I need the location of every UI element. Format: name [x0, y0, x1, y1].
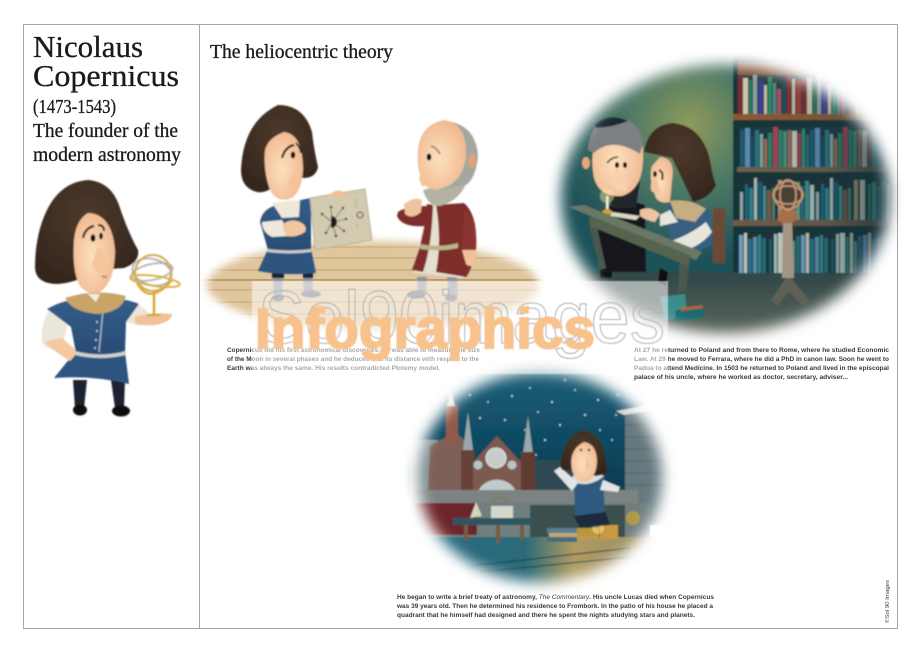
bookshelves	[732, 62, 890, 274]
eyes and brows	[91, 234, 95, 242]
watermark	[252, 276, 668, 374]
sloped desk	[569, 205, 702, 292]
stacked books	[660, 294, 704, 322]
hair	[241, 105, 318, 192]
watermark outline text: Sol90images	[258, 276, 665, 359]
legs and shoes	[73, 380, 125, 408]
chair	[713, 208, 725, 263]
book stacks and glowing chest	[547, 511, 640, 542]
open book with diagram	[310, 189, 372, 250]
copyright note: ©Sol 90 Images	[884, 580, 891, 623]
watermark orange text: Infographics	[255, 297, 595, 361]
Copernicus figure seated	[554, 430, 620, 528]
armillary sphere	[129, 254, 180, 315]
tutor figure	[582, 117, 646, 272]
subtitle: dates and role	[33, 97, 181, 166]
hair	[35, 180, 138, 284]
cathedral	[410, 392, 605, 492]
belt	[75, 351, 126, 358]
hand with palm up	[135, 313, 172, 325]
room background	[550, 54, 734, 273]
caption: first discoveries: Copernicus did his first astronomical discoveries: he was able to measure the size	[227, 347, 481, 354]
white sleeve right	[126, 300, 150, 326]
stars	[469, 379, 619, 456]
illustration: Copernicus holding armillary sphere	[35, 180, 180, 416]
caption: studies in Italy: Law. At 29 he moved to Ferrara, where he did a PhD in canon law. Soon he went to	[634, 356, 889, 363]
heading: The heliocentric theory	[210, 41, 393, 63]
caption: The Commentary and Frombork: was 39 years old. Then he determined his residence to Frombork. In the patio of his house he placed a	[396, 603, 714, 610]
caption: first discoveries: Earth was always the same. His results contradicted Ptolemy model.	[227, 365, 440, 372]
caption: The Commentary and Frombork: He began to write a brief treaty of astronomy, The Commentary . His uncle Lucas died when Copernicus	[397, 594, 715, 601]
night sky	[406, 362, 644, 494]
subtitle: dates and role: (1473-1543)	[33, 97, 116, 118]
nose	[92, 246, 107, 274]
watermark veil	[252, 281, 668, 374]
balustrade and lower wall	[410, 490, 650, 538]
floor carpet	[586, 271, 862, 341]
caption: studies in Italy: Padua to attend Medicine. In 1503 he returned to Poland and lived in the episcopal	[634, 365, 889, 372]
caption: studies in Italy: palace of his uncle, where he worked as doctor, secretary, adviser...	[634, 374, 848, 381]
armillary on wooden stand	[771, 180, 809, 306]
caption: studies in Italy: At 27 he returned to Poland and from there to Rome, where he studied Economic	[634, 347, 890, 354]
caption: first discoveries: of the Moon in several phases and he deduced that its distance with respect to the	[227, 356, 479, 363]
title: name: Copernicus	[33, 58, 179, 93]
subtitle: dates and role: The founder of the	[33, 121, 178, 142]
Copernicus figure at desk	[644, 123, 716, 255]
hand on hip	[44, 338, 78, 361]
caption: The Commentary and Frombork: quadrant that he himself had designed and there he spent the nights studying stars and planets.	[397, 612, 695, 619]
right brick wall	[616, 403, 675, 525]
Copernicus figure	[241, 105, 372, 302]
collar	[65, 292, 126, 314]
title block	[33, 29, 181, 166]
title: name: Nicolaus	[33, 29, 143, 64]
caption: The Commentary and Frombork	[396, 594, 715, 619]
caption: first discoveries	[227, 347, 481, 372]
scene: Copernicus shows book to Ptolemy on wooden floor	[202, 104, 544, 332]
torso	[47, 299, 139, 353]
face	[74, 213, 115, 293]
Ptolemy figure	[397, 120, 478, 302]
buttons	[94, 321, 98, 349]
title: name	[33, 29, 179, 93]
wooden floor	[202, 236, 544, 332]
face	[265, 132, 303, 200]
scene: Copernicus observing at night in patio	[400, 355, 680, 597]
subtitle: dates and role: modern astronomy	[33, 145, 181, 166]
skirt	[54, 352, 129, 384]
caption: studies in Italy	[634, 347, 890, 381]
scene: Copernicus and tutor in library	[550, 54, 900, 344]
floor	[426, 536, 652, 593]
white sleeve left	[42, 306, 68, 349]
candle	[600, 189, 614, 215]
table with instruments	[453, 497, 533, 543]
